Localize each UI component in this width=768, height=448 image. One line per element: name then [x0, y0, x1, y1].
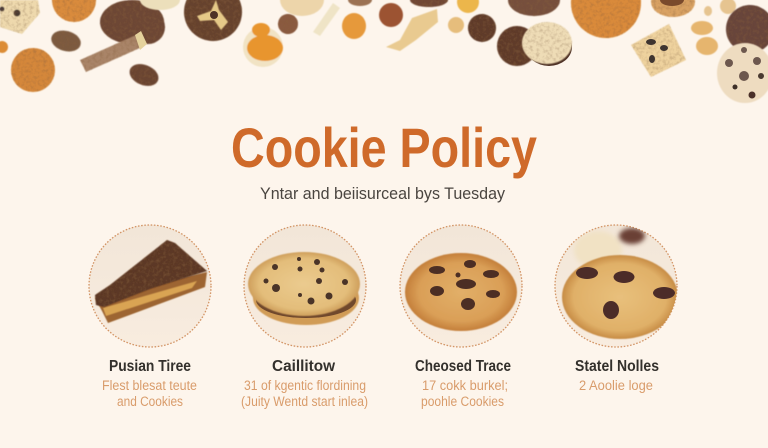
cookie: walnut pieces [691, 0, 736, 55]
icon: sandwich chip cookie in dashed circle [244, 225, 366, 347]
cookie: small oval [49, 27, 83, 55]
label heading: Caillitow [272, 358, 336, 375]
cookie: cream stick [313, 3, 340, 36]
cookie: brown top edge [410, 0, 448, 7]
label description: and Cookies [117, 394, 183, 409]
label heading: Pusian Tiree [109, 358, 191, 375]
label heading: Cheosed Trace [415, 358, 511, 375]
cookie: brown round [100, 0, 165, 44]
cookie: thumbprint [651, 0, 695, 17]
label description: (Juity Wentd start inlea) [241, 394, 368, 409]
panel: card 4 [555, 225, 678, 393]
label description: 31 of kgentic flordining [244, 378, 366, 393]
label description [421, 378, 508, 409]
panel: card 2 [241, 225, 368, 409]
label heading: Statel Nolles [575, 358, 659, 375]
title: Cookie Policy [231, 116, 537, 179]
cookie: large orange round [571, 0, 641, 38]
cookie: small dark oval [126, 60, 162, 90]
cookie: orange and cream crumble [243, 23, 283, 67]
cookie: caramel round [379, 3, 403, 27]
label description: 2 Aoolie loge [579, 378, 653, 393]
label description: Flest blesat teute [102, 378, 197, 393]
cookie: chocolate chip pale right [717, 43, 768, 103]
cookie: dark with cream trident [184, 0, 242, 41]
panel: card 1 [89, 225, 211, 409]
cookie: small nut [278, 14, 298, 34]
cookie: orange round left [11, 48, 55, 92]
cookie: cream shard [386, 9, 438, 51]
cookie: shortbread square with chips [631, 24, 686, 77]
panel: card 3 [400, 225, 522, 409]
cookie: brown round right [726, 5, 768, 53]
cookie: orange crumb [0, 41, 8, 53]
cookie: wafer stick [80, 31, 147, 72]
cookie: small chocolate round [468, 14, 496, 42]
cookie: cream fragment top [140, 0, 180, 10]
label description [241, 378, 368, 409]
scattered cookies banner [0, 0, 768, 103]
cookie: orange blob [342, 13, 366, 39]
icon: large chip cookie close-up in dashed circle [555, 225, 678, 347]
label description [102, 378, 197, 409]
label description: 17 cokk burkel; [422, 378, 508, 393]
cookie: cream top [280, 0, 324, 16]
subtitle: Yntar and beiisurceal bys Tuesday [260, 184, 505, 203]
cookie: sandwich cream and chocolate [497, 22, 572, 66]
cookie: shortbread top left [0, 0, 40, 34]
icon: golden chocolate chip cookie in dashed circle [400, 225, 522, 347]
cookie: orange round top [52, 0, 96, 22]
icon: chocolate wedge in dashed circle [89, 225, 211, 347]
label description: poohle Cookies [421, 394, 504, 409]
cookie: top brown edge [348, 0, 372, 6]
cookie: yellow crumb [457, 0, 479, 13]
cookie: small crumb [448, 17, 464, 33]
cookie: brown top round [508, 0, 560, 16]
